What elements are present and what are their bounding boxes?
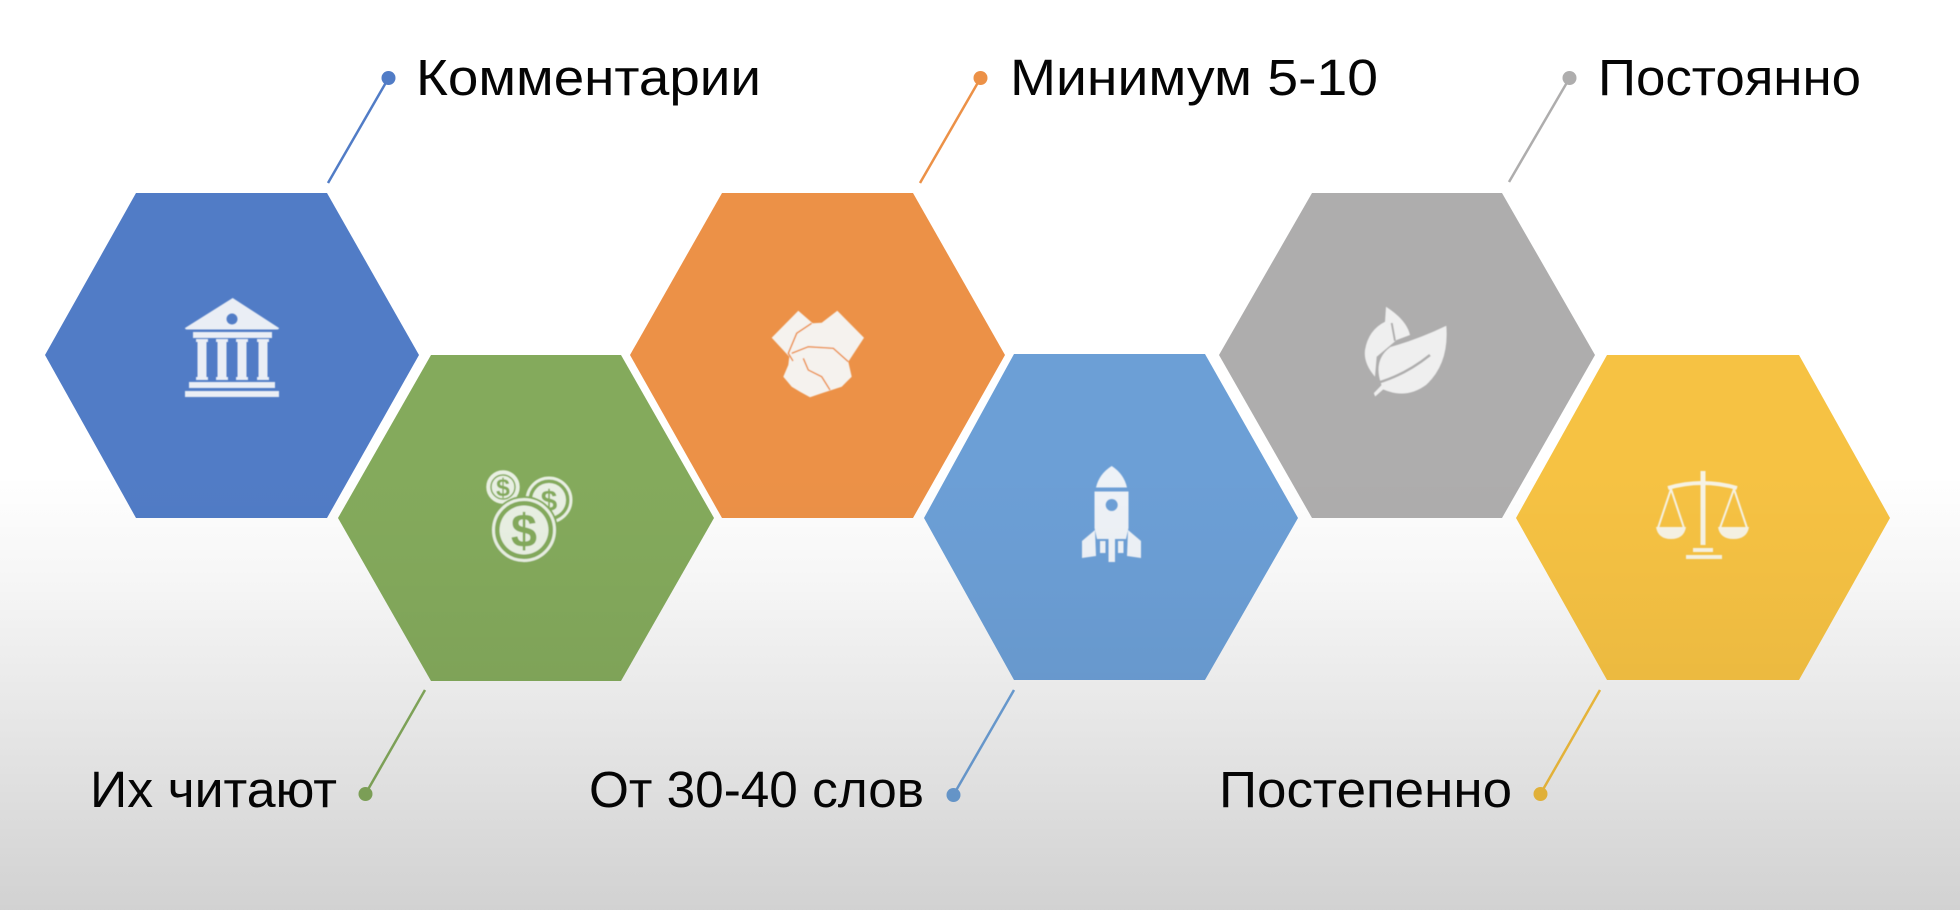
callout: Постоянно: Постоянно [1598,49,1861,106]
callout: Минимум 5-10: Минимум 5-10 [1010,49,1378,106]
icon: leaves [1365,307,1447,397]
callout: Постепенно: Постепенно [1219,761,1512,818]
icon: balance scales [1656,471,1749,559]
panel: light blue hexagon with rocket icon [924,354,1298,680]
icon: dollar coins: $ [511,504,537,557]
panel: blue hexagon with bank icon [45,193,419,518]
icon: dollar coins: $ [541,485,558,518]
callout: Их читают [90,690,425,818]
panel: yellow hexagon with scales icon [1516,355,1890,680]
icon: rocket [1082,466,1141,562]
panel: orange hexagon with handshake icon [630,193,1005,518]
callout: Комментарии: Комментарии [416,49,761,106]
icon: dollar coins: $ [496,474,510,502]
callout: Постепенно [1219,690,1600,818]
callout: От 30-40 слов [589,690,1014,818]
callout: Постоянно [1509,49,1861,182]
callout: Комментарии [328,49,761,183]
callout: Минимум 5-10 [920,49,1378,183]
icon: dollar coins [487,471,571,564]
panel: gray hexagon with leaves icon [1219,193,1595,518]
callout: От 30-40 слов: От 30-40 слов [589,761,924,818]
icon: bank building [185,298,279,397]
panel: green hexagon with coins icon [338,355,714,681]
callout: Их читают: Их читают [90,761,337,818]
icon: handshake [772,311,864,397]
